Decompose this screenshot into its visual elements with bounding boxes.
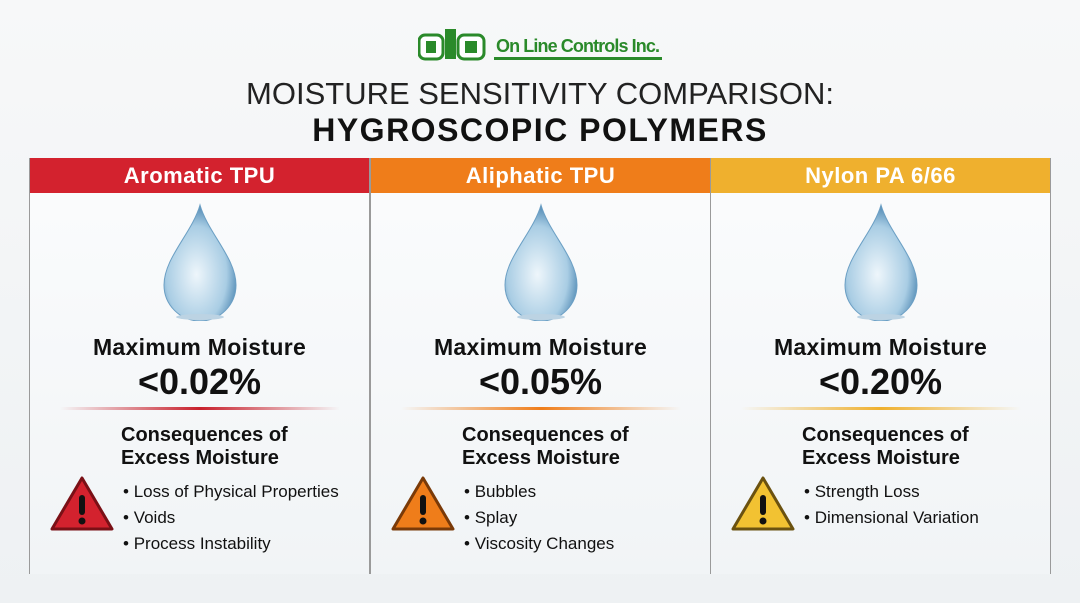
bullets: Loss of Physical Properties <box>134 482 339 501</box>
panel: Aliphatic TPU: Consequences of <box>462 424 629 446</box>
panel: Nylon: Nylon PA 6/66 <box>805 163 956 188</box>
icon: drop <box>504 203 578 321</box>
title: MOISTURE SENSITIVITY COMPARISON: <box>246 76 834 111</box>
title <box>246 76 834 148</box>
panel: Nylon: <0.20% <box>819 361 942 402</box>
icon: drop <box>844 203 918 321</box>
panel: Aromatic TPU <box>29 158 370 574</box>
panel: Nylon: Maximum Moisture <box>774 334 987 360</box>
consequences <box>121 424 288 469</box>
text: maximum: Maximum Moisture <box>93 334 306 360</box>
logo <box>418 29 662 60</box>
panel: Nylon: Strength Loss <box>815 482 920 501</box>
panel: Aliphatic TPU: Aliphatic TPU <box>466 163 615 188</box>
panel: Nylon: Dimensional Variation <box>815 508 979 527</box>
header <box>30 158 369 193</box>
panel: Aliphatic TPU: <0.05% <box>479 361 602 402</box>
consequences: Consequences of <box>121 424 288 446</box>
panel: Aliphatic TPU: Splay <box>475 508 517 527</box>
bullets: Voids <box>134 508 175 527</box>
panel: Aliphatic TPU: Viscosity Changes <box>475 534 614 553</box>
consequences: Excess Moisture <box>121 447 279 469</box>
icon: warning <box>50 476 114 530</box>
panel: Aliphatic TPU: Bubbles <box>475 482 536 501</box>
logo: On Line Controls Inc. <box>496 36 660 56</box>
panel: Aliphatic TPU: Excess Moisture <box>462 447 620 469</box>
panel: Nylon: Excess Moisture <box>802 447 960 469</box>
panel: Aliphatic TPU <box>370 158 711 574</box>
panel: Aliphatic TPU: Maximum Moisture <box>434 334 647 360</box>
icon: warning <box>392 476 455 530</box>
panel: Aromatic TPU: <0.02% <box>138 361 261 402</box>
title: HYGROSCOPIC POLYMERS <box>312 112 768 148</box>
panel: Nylon <box>710 158 1051 574</box>
bullets <box>124 482 339 553</box>
header: Aromatic TPU <box>124 163 275 188</box>
icon: drop <box>164 203 236 321</box>
bullets: Process Instability <box>134 534 271 553</box>
icon: warning <box>732 476 795 530</box>
panel: Nylon: Consequences of <box>802 424 969 446</box>
